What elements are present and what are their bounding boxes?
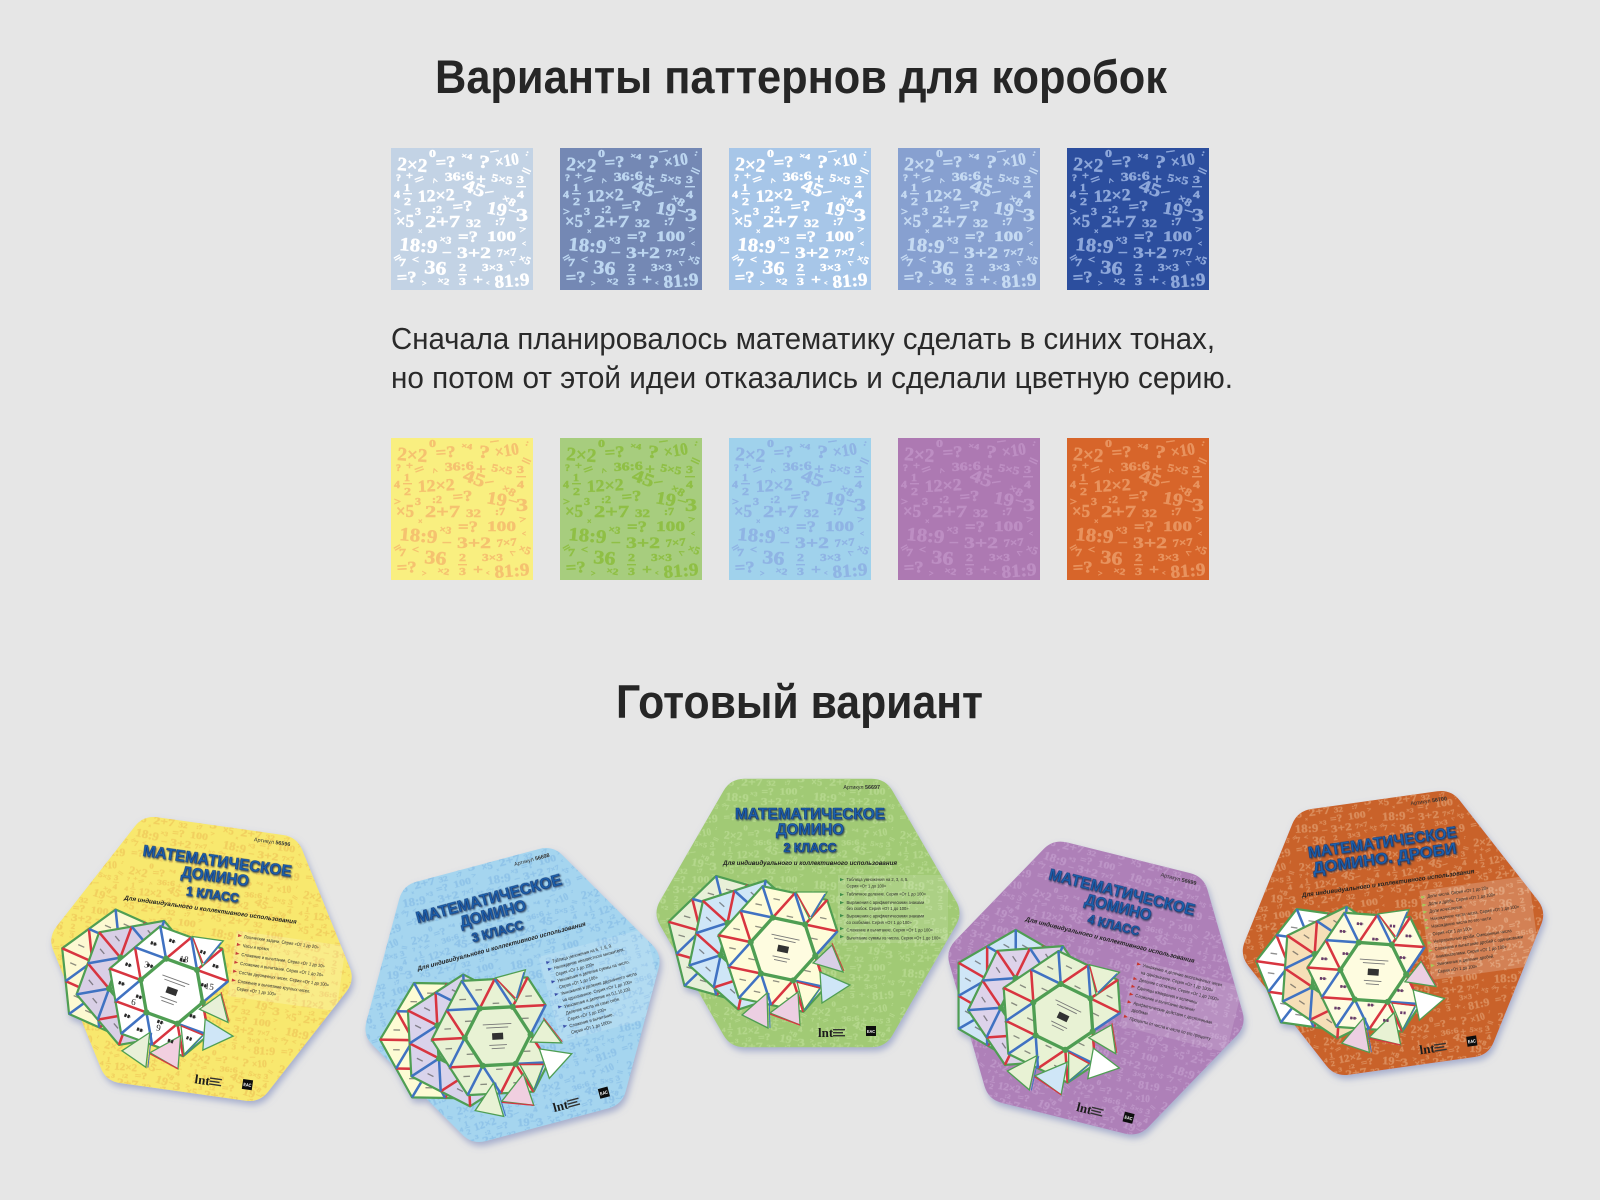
- topic list: Умножение и деление дробей.: [1436, 953, 1495, 967]
- box title: [1039, 867, 1197, 950]
- EAC mark: [242, 1079, 253, 1090]
- box: grade 3 blue: [364, 848, 665, 1150]
- box title: 2 КЛАСС: [784, 840, 837, 855]
- EAC mark: ЕАС: [599, 1089, 609, 1096]
- topic list: Нахождение неизвестного множителя.: [553, 947, 625, 971]
- topic list: Сложение и вычитание дробей с одинаковыми: [1434, 934, 1524, 952]
- topic list: Сложение и вычитание. Серия «От 1 до 20»: [240, 961, 324, 978]
- swatch: purple: [898, 438, 1040, 580]
- topic list: Таблица умножения на 6, 7, 8, 9.: [551, 943, 613, 964]
- topic list: Серия «От 1 до 100»: [1437, 963, 1478, 974]
- topic list: Серия «От 1 до 100»: [555, 961, 595, 977]
- topic list: [1421, 881, 1527, 975]
- box title: МАТЕМАТИЧЕСКОЕ: [1307, 824, 1458, 862]
- publisher logo: lnt: [194, 1071, 212, 1088]
- topic list: знаменателями. Серия «От 1 до 100»: [1435, 944, 1507, 959]
- card numbers: 6: [131, 997, 137, 1007]
- subtitle: Для индивидуального и коллективного использования: [1024, 915, 1196, 965]
- card icons: [1317, 921, 1413, 1022]
- card numbers: 18: [179, 953, 190, 965]
- topic list: Таблица умножения на 2, 3, 4, 5.: [846, 877, 908, 882]
- topic list: Часы и время: [242, 943, 270, 952]
- publisher logo: [1418, 1039, 1447, 1057]
- topic list: [840, 877, 941, 941]
- card numbers: [127, 948, 218, 1040]
- box title: ДОМИНО: [776, 822, 844, 838]
- explanatory text: но потом от этой идеи отказались и сделали цветную серию.: [391, 360, 1233, 395]
- publisher logo: lnt: [551, 1096, 570, 1115]
- box title: МАТЕМАТИЧЕСКОЕ: [414, 872, 564, 927]
- box title: МАТЕМАТИЧЕСКОЕ: [142, 843, 293, 881]
- topic list: Серия «От 1 до 100»: [1432, 926, 1473, 937]
- article number: Артикул 56596: [254, 837, 291, 848]
- topic list: [546, 938, 648, 1037]
- swatch: slate blue: [560, 148, 702, 290]
- article number: Артикул 56698: [514, 853, 550, 868]
- domino triangles cluster: [348, 931, 583, 1146]
- subtitle: Для индивидуального и коллективного использования: [1300, 867, 1475, 899]
- domino triangles cluster: [1232, 873, 1451, 1068]
- topic list: Нахождение числа по его части.: [1431, 915, 1493, 929]
- subtitle: Для индивидуального и коллективного использования: [722, 859, 897, 867]
- colour pattern swatches row: [391, 438, 1209, 580]
- topic list: Вычитание суммы из числа. Серия «От 1 до 100»: [846, 935, 941, 941]
- box title: [414, 872, 572, 958]
- publisher logo: [1075, 1099, 1105, 1120]
- topic list: Сложение и вычитание круглых чисел.: [237, 979, 311, 994]
- domino triangles cluster: [653, 858, 850, 1028]
- topic list: Логические задачи. Серия «От 1 до 20»: [244, 934, 320, 950]
- publisher logo: [818, 1025, 845, 1040]
- domino triangles cluster: [32, 883, 251, 1079]
- explanatory text: Сначала планировалось математику сделать в синих тонах,: [391, 321, 1215, 356]
- topic list: Умножение и деление суммы на число.: [557, 959, 630, 983]
- topic list: дробями: [1131, 1007, 1149, 1016]
- EAC mark: ЕАС: [1124, 1115, 1134, 1122]
- topic list: Доли исчисления.: [1429, 904, 1463, 914]
- EAC mark: [1123, 1112, 1135, 1124]
- card numbers: 15: [204, 981, 215, 992]
- swatch: pale blue: [391, 148, 533, 290]
- topic list: Деление числа на само себя.: [565, 996, 620, 1016]
- box title: МАТЕМАТИЧЕСКОЕ: [735, 806, 885, 823]
- topic list: Умножение и деление многозначных чисел: [1142, 963, 1223, 988]
- EAC mark: [598, 1087, 610, 1099]
- topic list: Неправильные дроби. Смешанные числа: [1433, 928, 1512, 944]
- box: grade 1 yellow: [50, 817, 357, 1108]
- box title: ДОМИНО: [1083, 891, 1153, 924]
- topic list: Серия «От 1 до 100»: [558, 974, 599, 990]
- topic list: [1123, 961, 1225, 1041]
- topic list: Арифметические действия с десятичными: [1133, 1000, 1213, 1025]
- EAC mark: ЕАС: [243, 1082, 252, 1088]
- EAC mark: [1466, 1035, 1477, 1047]
- publisher logo: [551, 1094, 581, 1115]
- topic list: Сложение и вычитание. Серия «От 1 до 10»: [241, 952, 326, 969]
- explanatory text: [391, 321, 1233, 395]
- card icons: [106, 929, 222, 1048]
- swatch: deep blue: [1067, 148, 1209, 290]
- box title: [735, 806, 885, 855]
- swatch: light blue: [729, 438, 871, 580]
- topic list: Сложение и вычитание величин: [1135, 993, 1196, 1013]
- article number: Артикул 56700: [1410, 796, 1447, 807]
- EAC mark: [866, 1026, 876, 1036]
- topic list: без скобок. Серия «От 1 до 100»: [846, 906, 909, 911]
- blue pattern swatches row: [391, 148, 1209, 290]
- subtitle: Для индивидуального и коллективного использования: [123, 894, 297, 926]
- swatch: green: [560, 438, 702, 580]
- swatch: orange: [1067, 438, 1209, 580]
- publisher logo: lnt: [1075, 1099, 1094, 1117]
- swatch: yellow: [391, 438, 533, 580]
- card numbers: 9: [156, 1022, 162, 1033]
- topic list: Проценты от числа и число по его проценту: [1129, 1016, 1212, 1041]
- subtitle: Для индивидуального и коллективного использования: [415, 920, 587, 973]
- EAC mark: ЕАС: [867, 1029, 876, 1034]
- article number: Артикул 56699: [1160, 872, 1197, 887]
- topic list: Выражения с арифметическими знаками: [846, 900, 925, 905]
- publisher logo: [194, 1071, 223, 1090]
- topic list: Сложение и вычитание. Серия «От 1 до 100»: [846, 927, 933, 933]
- box title: 4 КЛАСС: [1086, 911, 1142, 939]
- box title: 1 КЛАСС: [185, 883, 240, 906]
- swatch: sky blue: [729, 148, 871, 290]
- topic list: Сложение и вычитание.: [569, 1012, 614, 1029]
- topic list: Деление с остатком. Серия «От 1 до 1000»: [1139, 977, 1220, 1002]
- topic list: на однозначное. Серия «От 1 до 1000»: [1140, 970, 1214, 993]
- article number: Артикул 56697: [843, 785, 880, 791]
- box title: ДОМИНО: [180, 864, 250, 890]
- box: grade 2 green: [655, 778, 965, 1055]
- topic list: Состав двузначных чисел. Серия «От 1 до 100»: [239, 970, 330, 988]
- topic list: Единицы измерения и величины: [1137, 985, 1198, 1005]
- box title: [1307, 824, 1460, 878]
- box: grade 4 purple: [947, 842, 1249, 1142]
- box: fractions orange: [1242, 791, 1548, 1082]
- box title: ДОМИНО. ДРОБИ: [1312, 840, 1458, 877]
- topic list: Нахождение части числа. Серия «От 1 до 100»: [1430, 904, 1520, 921]
- publisher logo: lnt: [818, 1025, 834, 1040]
- EAC mark: ЕАС: [1468, 1038, 1477, 1044]
- swatch: periwinkle: [898, 148, 1040, 290]
- topic list: [230, 933, 335, 1004]
- topic list: Доли и дробь. Серия «От 1 до 100»: [1428, 892, 1496, 906]
- publisher logo: lnt: [1418, 1040, 1436, 1057]
- topic list: Умножение и деление двузначного числа: [560, 971, 638, 996]
- box title: МАТЕМАТИЧЕСКОЕ: [1047, 867, 1197, 919]
- box title: ДОМИНО: [458, 897, 528, 931]
- topic list: на однозначное. Серия «От 1 до 100»: [562, 979, 633, 1003]
- domino triangles cluster: [918, 897, 1150, 1110]
- topic list: Серия «От 1 до 100»: [846, 883, 887, 889]
- topic list: со скобками. Серия «От 1 до 100»: [846, 920, 912, 925]
- topic list: Выражения с арифметическими знаками: [846, 913, 925, 919]
- topic list: Серия «От 1 до 1000»: [571, 1019, 613, 1035]
- topic list: Доли числа. Серия «От 1 до 20»: [1427, 885, 1489, 899]
- heading: finished version: Готовый вариант: [616, 675, 983, 728]
- topic list: Серия «От 1 до 100»: [567, 1007, 607, 1022]
- title: box pattern variants: Варианты паттернов для коробок: [435, 50, 1167, 103]
- box title: 3 КЛАСС: [470, 917, 526, 945]
- topic list: Умножение и деление на 0,1,10,100.: [564, 986, 632, 1009]
- topic list: Табличное деление. Серия «От 1 до 100»: [846, 891, 926, 897]
- box title: [137, 843, 293, 912]
- card numbers: 3: [144, 959, 150, 970]
- topic list: Серия «От 1 до 100»: [236, 986, 277, 997]
